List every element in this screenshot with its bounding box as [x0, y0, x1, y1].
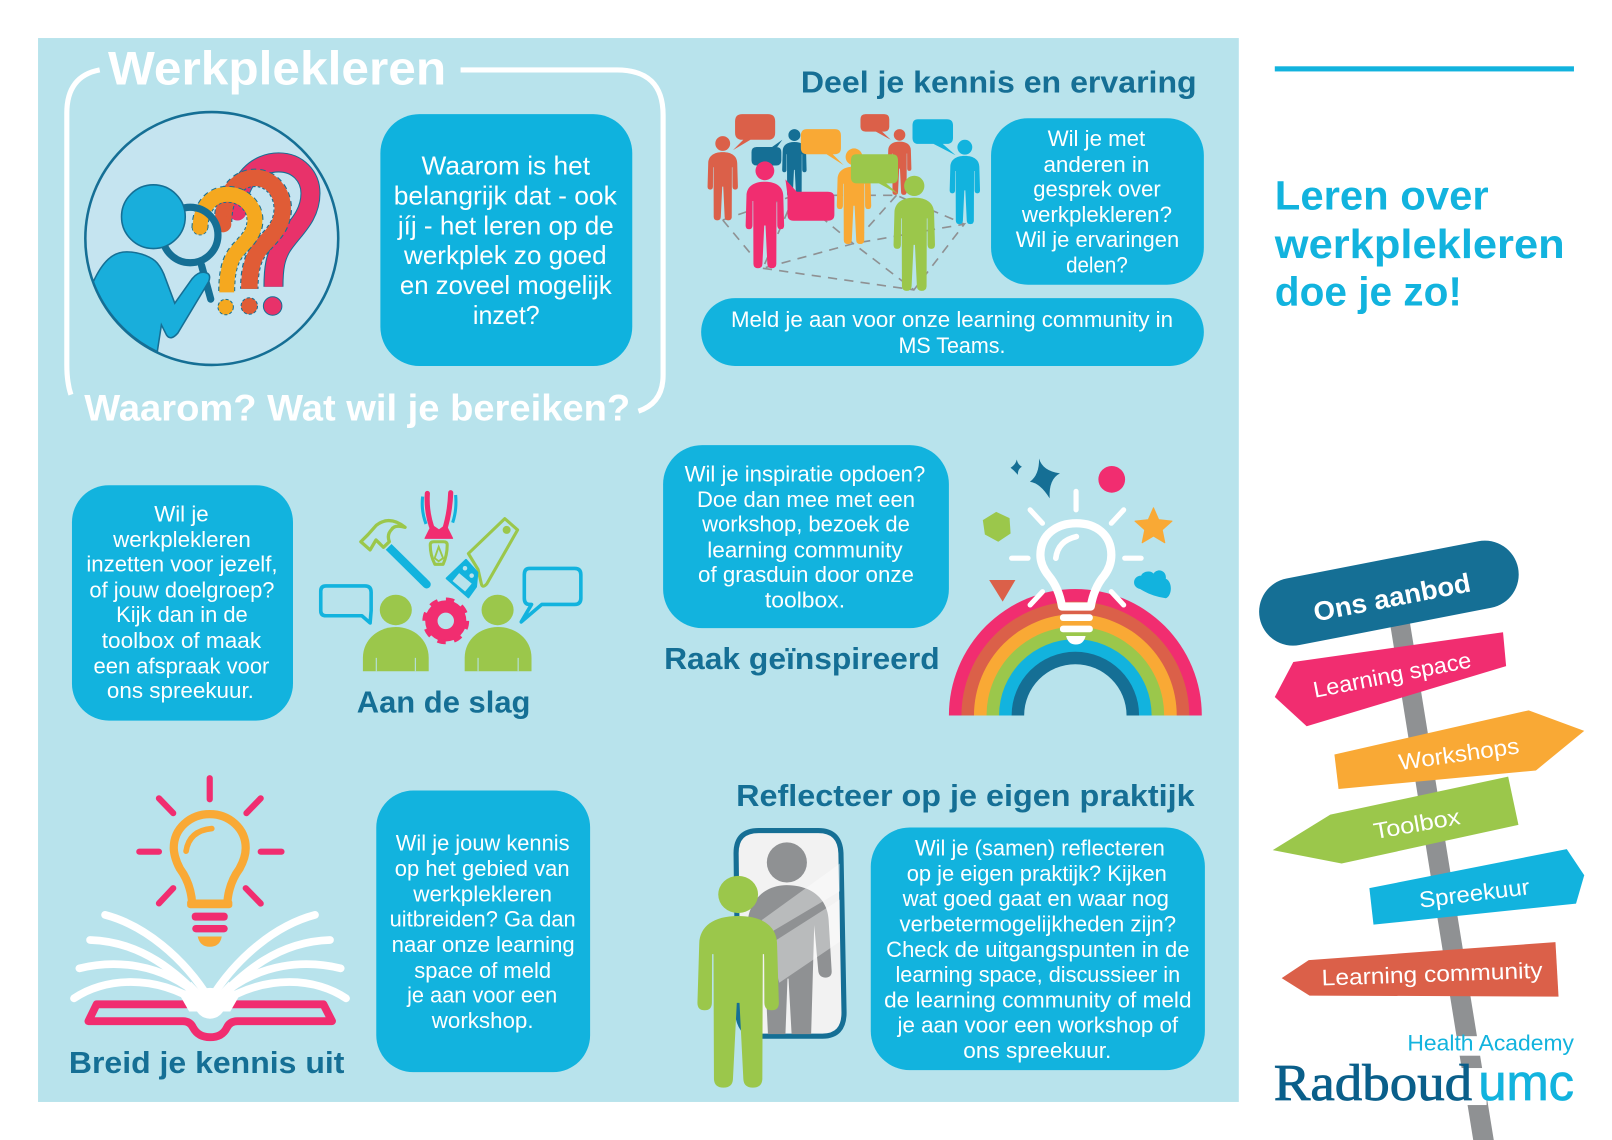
text bubble: inspiratie: learning community — [707, 537, 903, 562]
text bubble: toolbox — [72, 485, 293, 721]
text bubble: reflecteren: op je eigen praktijk? Kijken — [907, 861, 1167, 886]
icon: rainbow with light bulb — [949, 458, 1202, 715]
sign: Spreekuur — [1369, 849, 1584, 925]
section: Deel je kennis en ervaring — [701, 67, 1204, 366]
sign: Spreekuur: Spreekuur — [1418, 874, 1531, 913]
text bubble: Waarom — [380, 114, 632, 366]
text bubble: toolbox: toolbox of maak — [102, 628, 262, 653]
frame: white rounded outline — [67, 70, 663, 411]
text bubble: learning community: MS Teams. — [899, 333, 1005, 358]
text bubble: in gesprek: werkplekleren? — [1021, 202, 1172, 227]
heading: Werkplekleren: Werkplekleren — [108, 42, 446, 95]
icon: tools, gear and two people — [321, 493, 581, 671]
text bubble: toolbox: werkplekleren — [112, 527, 251, 552]
text bubble: inspiratie: Doe dan mee met een — [697, 487, 915, 512]
text bubble: learning space: space of meld — [414, 958, 551, 983]
logo: Radboudumc Health Academy: umc — [1478, 1053, 1574, 1111]
text bubble: toolbox: inzetten voor jezelf, — [86, 552, 278, 577]
section: Werkplekleren — [67, 42, 663, 428]
text bubble: toolbox: Kijk dan in de — [116, 602, 248, 627]
icon: open book with light bulb — [74, 778, 346, 1037]
text bubble: reflecteren: je aan voor een workshop of — [896, 1012, 1179, 1037]
heading: Raak geinspireerd: Raak geïnspireerd — [664, 643, 940, 676]
sign: Workshops — [1334, 710, 1584, 789]
text bubble: Waarom: jíj - het leren op de — [397, 210, 614, 240]
text bubble: in gesprek: Wil je ervaringen — [1016, 227, 1179, 252]
logo: Radboudumc Health Academy: Health Academy — [1407, 1031, 1574, 1056]
title: Leren over werkplekleren doe je zo: werkplekleren — [1274, 221, 1565, 267]
sign: Learning space — [1275, 632, 1506, 726]
text bubble: learning space: uitbreiden? Ga dan — [390, 906, 576, 931]
text bubble: toolbox: Wil je — [154, 501, 209, 526]
sign: Toolbox: Toolbox — [1372, 804, 1463, 844]
text bubble: inspiratie — [663, 445, 949, 628]
sign: Ons aanbod — [1253, 535, 1525, 652]
title: Leren over werkplekleren doe je zo: Leren over — [1275, 173, 1489, 219]
text bubble: Waarom: werkplek zo goed — [403, 240, 607, 270]
text bubble: learning space: naar onze learning — [392, 932, 575, 957]
text bubble: Waarom: inzet? — [473, 300, 540, 330]
text bubble: toolbox: of jouw doelgroep? — [89, 577, 274, 602]
text bubble: Waarom: Waarom is het — [422, 151, 591, 181]
section: Raak geinspireerd — [663, 445, 1202, 715]
text bubble: learning space: op het gebied van — [395, 856, 570, 881]
text bubble: Waarom: en zoveel mogelijk — [400, 270, 613, 300]
text bubble: reflecteren — [871, 828, 1205, 1070]
text bubble: inspiratie: Wil je inspiratie opdoen? — [685, 461, 925, 486]
text bubble: learning community: Meld je aan voor onze learning community in — [731, 307, 1173, 332]
sign: Ons aanbod: Ons aanbod — [1311, 568, 1473, 627]
pole — [1390, 620, 1494, 1140]
text bubble: in gesprek: gesprek over — [1033, 177, 1161, 202]
text bubble: reflecteren: learning space, discussieer in — [895, 962, 1180, 987]
decorative line — [1275, 66, 1574, 71]
text bubble: toolbox: een afspraak voor — [94, 654, 269, 679]
text bubble: Waarom: belangrijk dat - ook — [394, 181, 618, 211]
icon: person with magnifier and question marks — [85, 112, 338, 365]
section: Breid je kennis uit — [69, 778, 590, 1080]
icon: network of people with speech bubbles — [708, 114, 980, 291]
text bubble: in gesprek: anderen in — [1043, 152, 1149, 177]
section: Aan de slag — [72, 485, 581, 721]
title: Leren over werkplekleren doe je zo — [1274, 173, 1565, 314]
text bubble: toolbox: ons spreekuur. — [107, 678, 254, 703]
panel: main background — [38, 38, 1239, 1102]
text bubble: learning space: je aan voor een — [406, 982, 557, 1007]
text bubble: reflecteren: Check de uitgangspunten in de — [886, 937, 1189, 962]
heading: Reflecteer op je eigen praktijk: Reflecteer op je eigen praktijk — [736, 780, 1195, 813]
sign: Learning community — [1282, 942, 1559, 997]
sign: Workshops: Workshops — [1397, 733, 1521, 775]
sign: Learning community: Learning community — [1321, 958, 1544, 991]
text bubble: learning space: Wil je jouw kennis — [396, 830, 570, 855]
text bubble: in gesprek: Wil je met — [1048, 126, 1145, 151]
text bubble: inspiratie: toolbox. — [765, 588, 845, 613]
text bubble: in gesprek — [991, 118, 1204, 285]
text bubble: inspiratie: of grasduin door onze — [698, 562, 914, 587]
text bubble: inspiratie: workshop, bezoek de — [701, 512, 910, 537]
text bubble: reflecteren: verbetermogelijkheden zijn? — [900, 912, 1176, 937]
text bubble: in gesprek: delen? — [1066, 253, 1128, 278]
logo: Radboudumc Health Academy — [1274, 1031, 1574, 1112]
title: Leren over werkplekleren doe je zo: doe je zo! — [1275, 268, 1462, 314]
text bubble: learning space — [376, 790, 590, 1072]
text bubble: learning space: werkplekleren — [412, 882, 552, 907]
heading: Waarom? Wat wil je bereiken?: Waarom? Wat wil je bereiken? — [84, 387, 630, 428]
text bubble: learning space: workshop. — [431, 1008, 534, 1033]
heading: Breid je kennis uit: Breid je kennis uit — [69, 1047, 344, 1080]
text bubble: reflecteren: de learning community of meld — [884, 988, 1192, 1013]
section: Reflecteer op je eigen praktijk — [697, 780, 1205, 1088]
sign: Toolbox — [1273, 777, 1518, 863]
text bubble: learning community — [701, 298, 1204, 366]
signpost: Ons aanbod — [1253, 535, 1584, 1140]
sign: Learning space: Learning space — [1311, 647, 1473, 703]
logo: Radboudumc Health Academy: Radboud — [1274, 1055, 1472, 1112]
text bubble: reflecteren: wat goed gaat en waar nog — [902, 886, 1169, 911]
icon: person in front of mirror — [697, 831, 844, 1088]
heading: Deel je kennis en ervaring: Deel je kennis en ervaring — [801, 67, 1197, 100]
text bubble: reflecteren: Wil je (samen) reflecteren — [915, 835, 1165, 860]
text bubble: reflecteren: ons spreekuur. — [963, 1038, 1111, 1063]
heading: Aan de slag: Aan de slag — [357, 686, 530, 719]
